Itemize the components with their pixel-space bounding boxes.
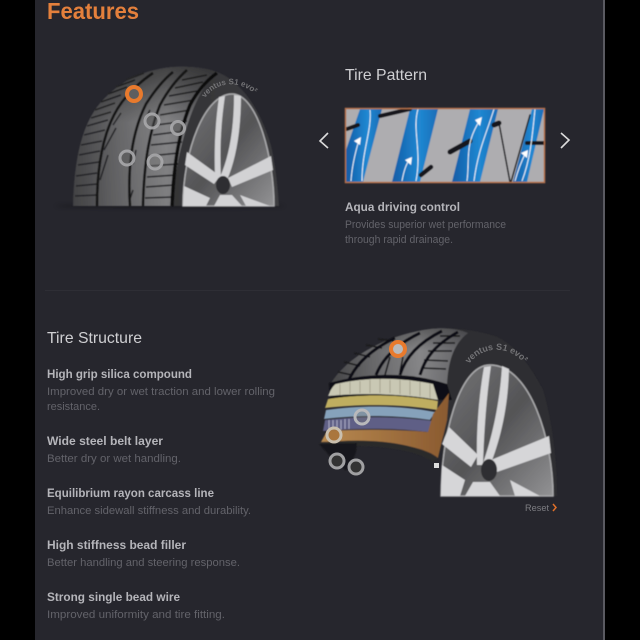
text block: Aqua driving control: through rapid drainage.	[345, 234, 453, 246]
marker: bead wire ring	[349, 460, 363, 474]
text block: Equilibrium rayon carcass line	[47, 486, 251, 517]
arrow: next	[561, 133, 569, 148]
marker: ring 5	[148, 155, 162, 169]
illustration: tire cross-section	[320, 328, 556, 498]
text block: Equilibrium rayon carcass line: Equilibrium rayon carcass line	[47, 486, 214, 500]
layer: yellow belt	[325, 395, 438, 410]
illustration: tire with pattern markers	[73, 66, 279, 208]
text block: Strong single bead wire: Improved uniformity and tire fitting.	[47, 609, 225, 621]
layer: purple carcass	[323, 417, 433, 432]
heading: Tire Pattern: Tire Pattern	[345, 67, 427, 84]
marker: ring 3	[172, 122, 184, 134]
text block: High stiffness bead filler: High stiffness bead filler	[47, 538, 186, 552]
text: sidewall brand mark: ventus S1 evo²	[466, 344, 528, 362]
text block: Aqua driving control	[345, 200, 506, 246]
layer: silica compound cream	[328, 379, 438, 400]
text block: High grip silica compound: High grip silica compound	[47, 367, 192, 381]
text block: High grip silica compound: resistance.	[47, 401, 100, 413]
arrow: previous	[320, 133, 328, 148]
text block: High grip silica compound	[47, 367, 275, 413]
wheel rim	[441, 365, 553, 496]
marker: carcass ring	[327, 428, 341, 442]
image: tire pattern water channels	[346, 108, 544, 182]
text: sidewall brand mark: ventus S1 evo²	[202, 78, 258, 97]
layer: sidewall bead	[319, 443, 357, 470]
text block: High grip silica compound: Improved dry or wet traction and lower rolling	[47, 386, 275, 398]
layer: blue belt	[324, 406, 435, 420]
text block: Wide steel belt layer	[47, 434, 181, 465]
heading: Tire Structure: Tire Structure	[47, 330, 142, 347]
marker: ring 4	[120, 151, 134, 165]
text block: Strong single bead wire	[47, 590, 225, 621]
marker: small square tag	[434, 463, 439, 468]
marker: orange active ring	[127, 87, 141, 101]
link: Reset: Reset	[525, 503, 549, 514]
marker: bead filler ring	[330, 454, 344, 468]
text block: Wide steel belt layer: Wide steel belt layer	[47, 434, 163, 448]
layer: brown inner liner	[321, 393, 449, 458]
layer: black tread base	[329, 375, 452, 400]
text block: Wide steel belt layer: Better dry or wet handling.	[47, 453, 181, 465]
text block: High stiffness bead filler	[47, 538, 240, 569]
text block: Aqua driving control: Provides superior wet performance	[345, 219, 506, 231]
text block: Strong single bead wire: Strong single bead wire	[47, 590, 180, 604]
text block: Equilibrium rayon carcass line: Enhance sidewall stiffness and durability.	[47, 505, 251, 517]
text block: High stiffness bead filler: Better handling and steering response.	[47, 557, 240, 569]
marker: ring 2	[145, 114, 159, 128]
text block: Aqua driving control: Aqua driving control	[345, 200, 460, 214]
marker: steel belt ring	[355, 410, 369, 424]
marker: orange active ring	[391, 342, 405, 356]
